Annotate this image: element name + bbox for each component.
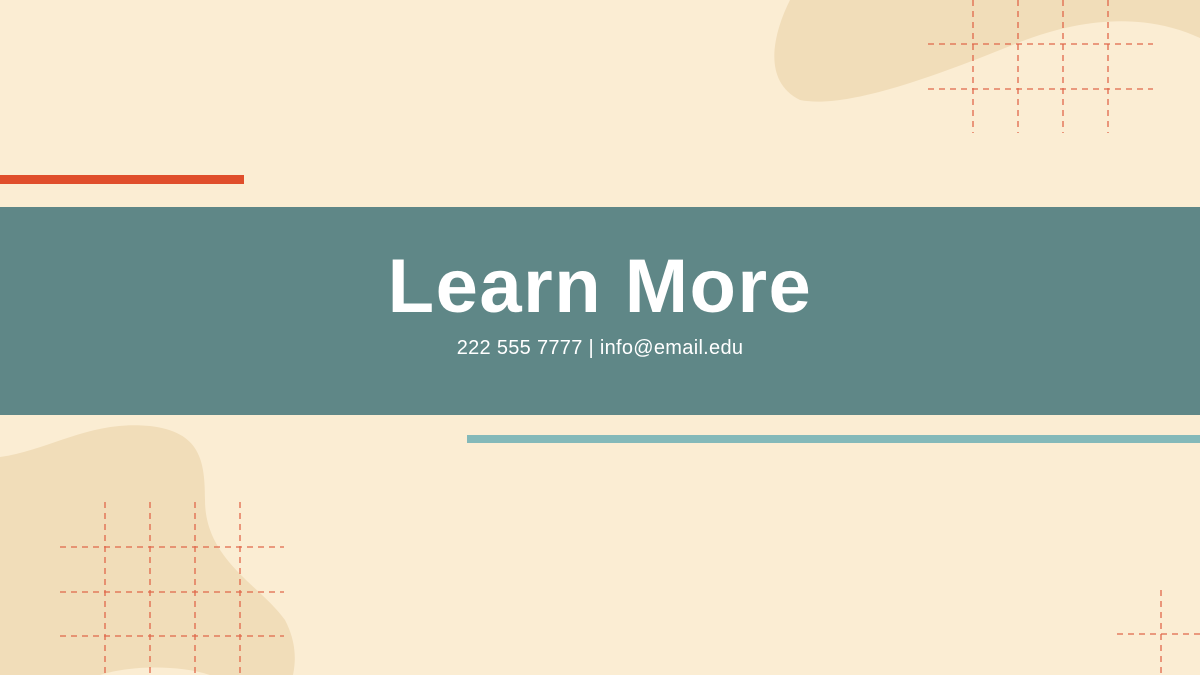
grid: top right xyxy=(928,0,1153,133)
red accent bar xyxy=(0,175,244,184)
teal band xyxy=(0,207,1200,415)
blob: bottom left xyxy=(0,425,295,675)
grid: bottom right xyxy=(1117,590,1200,675)
title: Learn More xyxy=(388,244,812,329)
grid: bottom left xyxy=(60,502,284,675)
blob: top right xyxy=(774,0,1200,102)
light teal accent bar xyxy=(467,435,1200,443)
contact info: 222 555 7777 | info@email.edu xyxy=(457,337,743,359)
